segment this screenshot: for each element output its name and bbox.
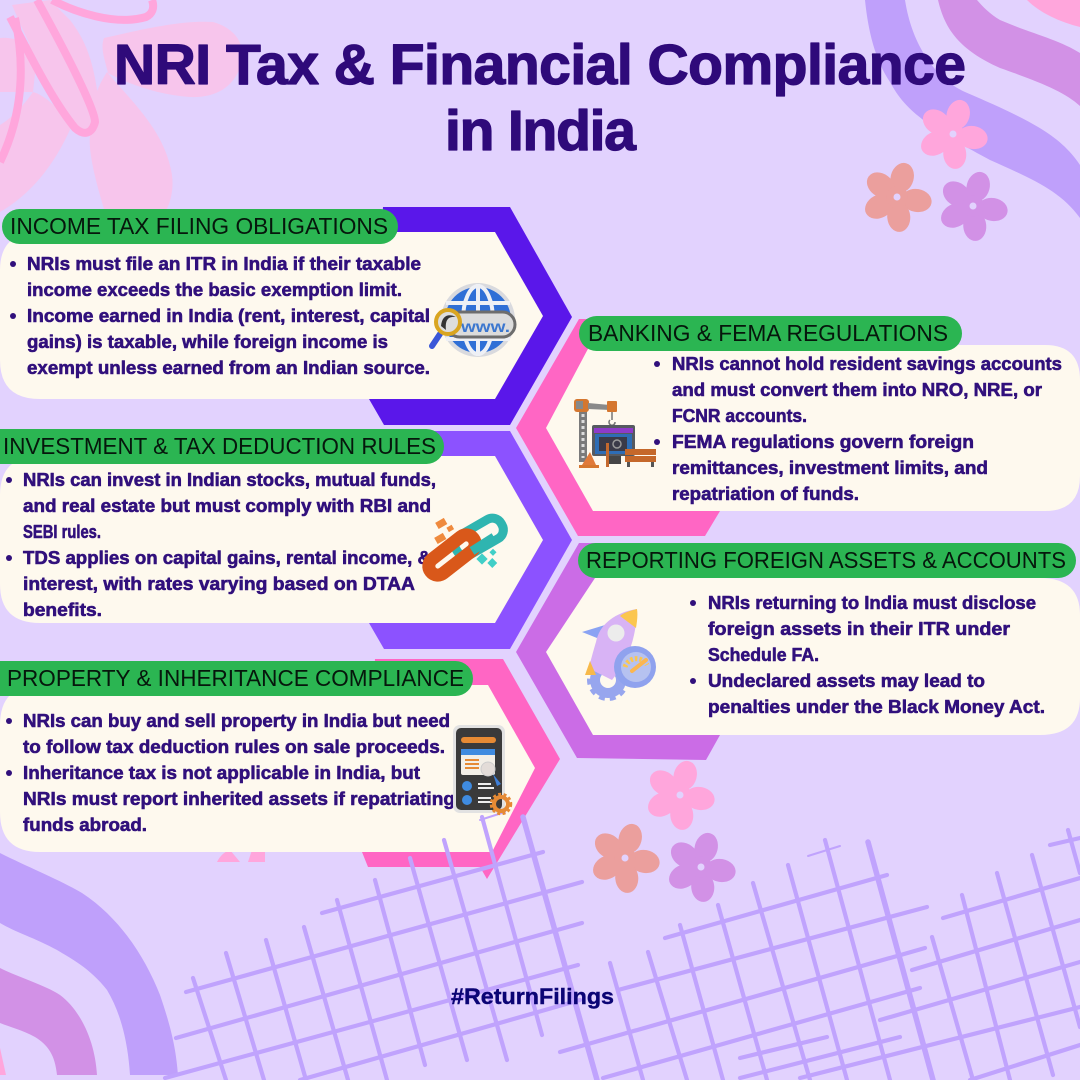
bullets: gains) is taxable, while foreign income is: [27, 331, 388, 352]
bullets: Undeclared assets may lead to: [708, 670, 985, 691]
bullets: NRIs must file an ITR in India if their taxable: [27, 253, 421, 274]
bullets: remittances, investment limits, and: [672, 457, 988, 478]
decorative arcs bottom left: [0, 853, 178, 1075]
heading pill: REPORTING FOREIGN ASSETS & ACCOUNTS: [586, 547, 1066, 573]
bullets: NRIs returning to India must disclose: [708, 592, 1036, 613]
heading pill: PROPERTY & INHERITANCE COMPLIANCE: [7, 665, 464, 691]
panel: banking and FEMA: [516, 316, 1080, 536]
bullets: SEBI rules.: [23, 521, 101, 542]
hashtag footer: #ReturnFilings: [451, 984, 614, 1009]
bullets: [690, 592, 1045, 717]
icon: www globe: [432, 283, 515, 357]
icon: rocket and gauge: [582, 609, 656, 699]
bullets: Inheritance tax is not applicable in India, but: [23, 762, 420, 783]
hexagon frame: [362, 659, 560, 879]
cream panel: [0, 685, 535, 852]
bullets: to follow tax deduction rules on sale proceeds.: [23, 736, 445, 757]
bullets: [6, 469, 436, 620]
hexagon frame: [369, 207, 572, 425]
decorative flowers bottom: [217, 758, 737, 903]
decorative flower top left: [0, 0, 242, 212]
heading pill: INCOME TAX FILING OBLIGATIONS: [10, 213, 388, 239]
bullets: funds abroad.: [23, 814, 147, 835]
title: NRI Tax & Financial Compliance: [114, 33, 966, 97]
hexagon frame: [516, 543, 720, 760]
bullets: NRIs can invest in Indian stocks, mutual funds,: [23, 469, 436, 490]
bullets: and real estate but must comply with RBI and: [23, 495, 431, 516]
bullets: NRIs cannot hold resident savings accounts: [672, 353, 1062, 374]
heading pill: BANKING & FEMA REGULATIONS: [588, 320, 948, 346]
decorative flowers top right: [861, 97, 1009, 242]
bullets: FCNR accounts.: [672, 405, 807, 426]
decorative grid: [165, 812, 1080, 1080]
bullets: benefits.: [23, 599, 102, 620]
panel: investment and tax deduction: [0, 429, 572, 649]
bullets: NRIs can buy and sell property in India but need: [23, 710, 450, 731]
bullets: income exceeds the basic exemption limit.: [27, 279, 402, 300]
icon: chain link: [425, 514, 507, 579]
panel: reporting foreign assets: [516, 543, 1080, 760]
panel: property and inheritance: [0, 659, 560, 879]
bullets: interest, with rates varying based on DTAA: [23, 573, 415, 594]
cream panel: [0, 456, 543, 623]
panel: income tax filing: [0, 207, 572, 425]
bullets: Schedule FA.: [708, 644, 819, 665]
bullets: TDS applies on capital gains, rental income, &: [23, 547, 431, 568]
heading pill: INVESTMENT & TAX DEDUCTION RULES: [3, 433, 436, 459]
cream panel: [0, 232, 543, 399]
title: [114, 33, 966, 163]
bullets: exempt unless earned from an Indian source.: [27, 357, 430, 378]
cream panel: [546, 345, 1080, 511]
bullets: [6, 710, 455, 835]
bullets: [654, 353, 1062, 504]
icon: www globe: www.: [460, 319, 510, 336]
decorative waves top right: [865, 0, 1080, 218]
cream panel: [546, 578, 1080, 735]
bullets: FEMA regulations govern foreign: [672, 431, 974, 452]
bullets: foreign assets in their ITR under: [708, 618, 1010, 639]
bullets: NRIs must report inherited assets if repatriating: [23, 788, 455, 809]
bullets: Income earned in India (rent, interest, capital: [27, 305, 430, 326]
title: in India: [445, 99, 637, 163]
hexagon frame: [369, 431, 572, 649]
bullets: penalties under the Black Money Act.: [708, 696, 1045, 717]
icon: phone app: [453, 725, 511, 814]
bullets: [10, 253, 430, 378]
bullets: and must convert them into NRO, NRE, or: [672, 379, 1042, 400]
bullets: repatriation of funds.: [672, 483, 859, 504]
icon: crane and monitor: [574, 399, 656, 468]
hexagon frame: [516, 319, 720, 536]
